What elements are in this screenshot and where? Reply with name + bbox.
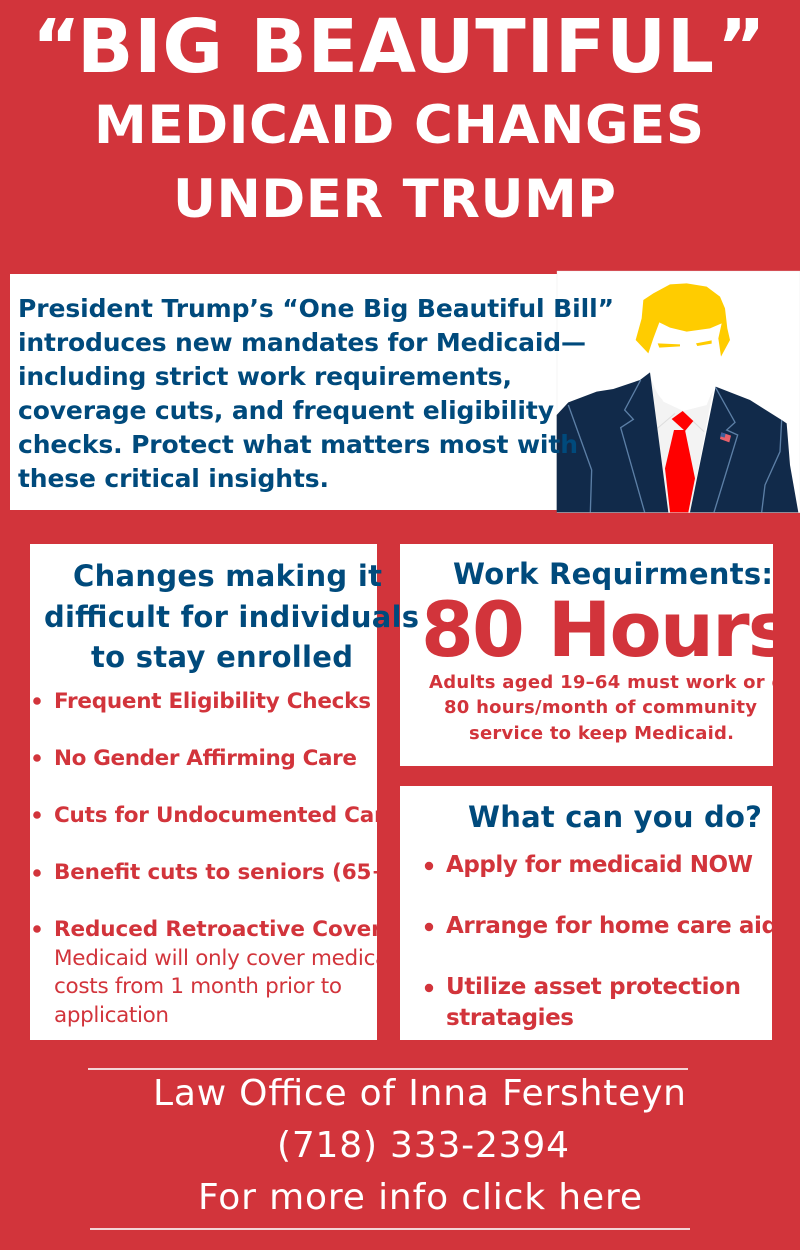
panel: introduction background (10, 274, 558, 510)
work requirement description: Adults aged 19–64 must work or do (429, 672, 797, 693)
title: ” (717, 4, 766, 90)
list of changes: Frequent Eligibility Checks (54, 689, 371, 714)
list of actions: stratagies (446, 1005, 574, 1031)
heading: what can you do: What can you do? (468, 800, 762, 834)
list of actions: Arrange for home care aid (446, 913, 778, 939)
footer contact details: (718) 333-2394 (277, 1125, 569, 1166)
title: MEDICAID CHANGES (94, 95, 704, 156)
list of changes: Medicaid will only cover medical (54, 946, 394, 971)
panel: changes list (30, 544, 377, 1040)
introduction text (18, 294, 614, 493)
divider: footer top (88, 1068, 688, 1070)
heading: changes making it difficult: Changes making it (73, 559, 382, 593)
list of changes: Benefit cuts to seniors (65+) (54, 860, 399, 885)
heading: changes making it difficult (44, 559, 419, 674)
list of changes: No Gender Affirming Care (54, 746, 357, 771)
list of changes: application (54, 1003, 169, 1028)
panel: what can you do (400, 786, 778, 1040)
divider: footer bottom (90, 1228, 690, 1230)
work requirement description (429, 674, 773, 742)
footer contact details (153, 1073, 686, 1218)
title (32, 4, 766, 230)
title: UNDER TRUMP (173, 169, 616, 230)
list of changes: Cuts for Undocumented Care (54, 803, 399, 828)
panel: work requirements (400, 544, 797, 766)
list of changes (33, 692, 377, 1026)
list of changes: costs from 1 month prior to (54, 974, 342, 999)
footer contact details: Law Office of Inna Fershteyn (153, 1073, 686, 1114)
heading: changes making it difficult: to stay enrolled (91, 640, 353, 674)
introduction text: coverage cuts, and frequent eligibility (18, 396, 554, 425)
introduction text: checks. Protect what matters most with (18, 430, 578, 459)
list of actions: Utilize asset protection (446, 974, 741, 1000)
illustration: faceless suited figure (557, 271, 800, 513)
introduction text: including strict work requirements, (18, 362, 512, 391)
introduction text: these critical insights. (18, 464, 329, 493)
work requirement description: 80 hours/month of community (444, 697, 757, 718)
introduction text: President Trump’s “One Big Beautiful Bill” (18, 294, 614, 323)
heading: changes making it difficult: difficult for individuals (44, 600, 419, 634)
big number: 80 hours: 80 Hours (421, 585, 793, 674)
title: BIG BEAUTIFUL (77, 4, 714, 90)
title: “ (32, 4, 81, 90)
work requirement description: service to keep Medicaid. (469, 723, 734, 744)
list of changes: Reduced Retroactive Coverage (54, 917, 426, 942)
introduction text: introduces new mandates for Medicaid— (18, 328, 586, 357)
footer contact details: For more info click here (198, 1177, 642, 1218)
list of actions (425, 852, 778, 1031)
list of actions: Apply for medicaid NOW (446, 852, 753, 878)
heading: work requirements: Work Requirments: (453, 557, 773, 591)
